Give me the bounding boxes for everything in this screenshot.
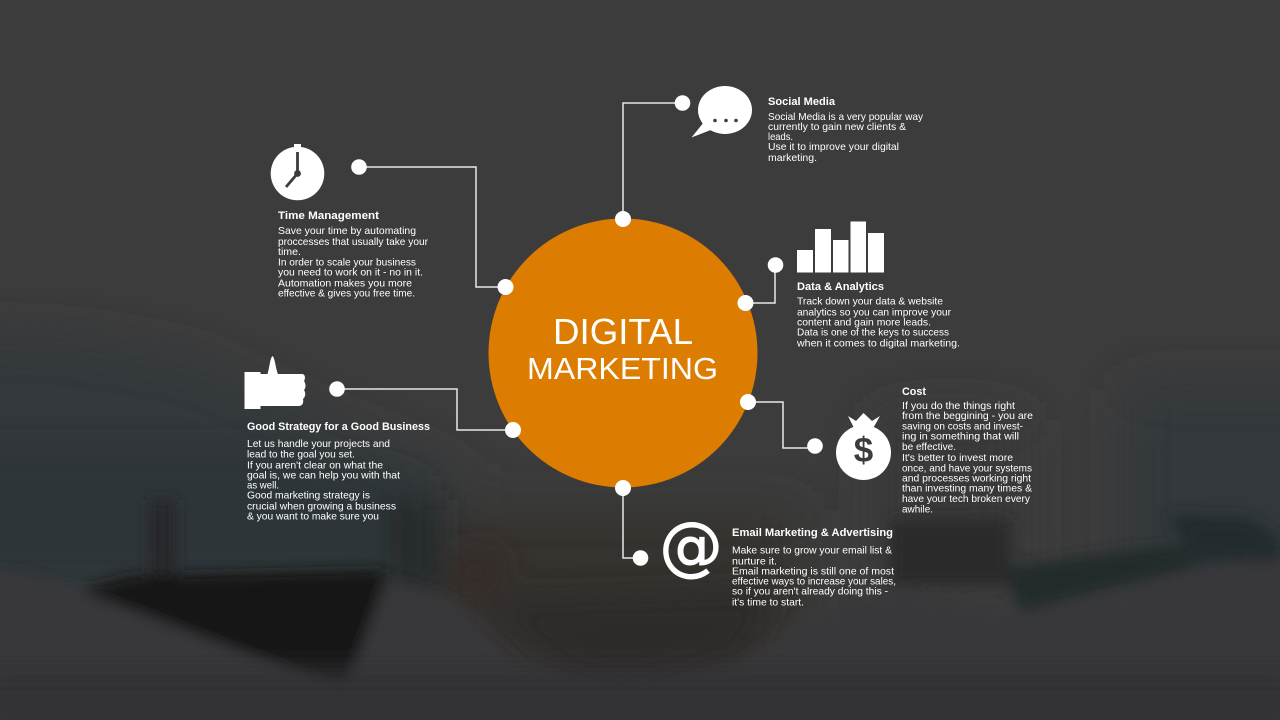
text: email marketing body: Make sure to grow your email list & [732, 544, 892, 556]
text: cost body [902, 400, 1033, 516]
heading: good strategy: Good Strategy for a Good Business [247, 421, 430, 433]
text: good strategy body: lead to the goal you set. [247, 448, 355, 460]
icon: clock [271, 144, 324, 200]
panel: cost [836, 386, 1033, 516]
text: time management body: In order to scale your business [278, 256, 416, 268]
text: time management body: Automation makes you more [278, 278, 412, 290]
panel: time management [271, 144, 428, 300]
text: good strategy body: as well. [247, 480, 279, 492]
text: email marketing body: Email marketing is still one of most [732, 566, 894, 578]
text: cost body: have your tech broken every [902, 493, 1031, 505]
text: social media body [768, 111, 924, 164]
text: good strategy body: crucial when growing a business [247, 500, 396, 512]
panel: data and analytics [796, 222, 960, 350]
text: social media body: Social Media is a very popular way [768, 111, 924, 123]
heading: data and analytics: Data & Analytics [797, 281, 884, 293]
text: time management body [278, 225, 428, 300]
text: cost body: ing in something that will [902, 430, 1019, 442]
text: cost body: If you do the things right [902, 400, 1015, 412]
text: cost body: and processes working right [902, 472, 1031, 484]
text: time management body: time. [278, 246, 301, 258]
icon: money bag: $ [854, 431, 873, 470]
text: data and analytics body [796, 296, 960, 350]
text: cost body: than investing many times & [902, 482, 1032, 494]
text: data and analytics body: Track down your data & website [797, 296, 943, 308]
text: email marketing body: it's time to start. [732, 596, 804, 608]
central title: DIGITAL [553, 311, 693, 352]
heading: social media: Social Media [768, 96, 836, 108]
connector dots [329, 95, 823, 566]
text: data and analytics body: analytics so you can improve your [797, 306, 951, 318]
text: data and analytics body: Data is one of the keys to success [797, 326, 949, 338]
heading: cost: Cost [902, 386, 926, 398]
text: email marketing body: so if you aren't already doing this - [732, 586, 888, 598]
icon: at sign: @ [660, 510, 722, 584]
icon: money bag [836, 413, 891, 480]
heading: email marketing: Email Marketing & Advertising [732, 527, 893, 539]
text: data and analytics body: content and gain more leads. [797, 316, 931, 328]
heading: time management: Time Management [278, 210, 379, 222]
text: cost body: be effective. [902, 441, 956, 453]
text: good strategy body: goal is, we can help you with that [247, 470, 400, 482]
text: social media body: Use it to improve your digital [768, 141, 899, 153]
text: cost body: once, and have your systems [902, 462, 1032, 474]
icon: bar chart [797, 222, 884, 272]
text: cost body: awhile. [902, 504, 933, 516]
central title [527, 311, 718, 386]
text: email marketing body [732, 544, 896, 608]
connector lines [337, 103, 815, 558]
central title: MARKETING [527, 351, 718, 386]
text: good strategy body: & you want to make sure you [247, 510, 379, 522]
text: time management body: proccesses that usually take your [278, 236, 428, 248]
icon: speech bubble [692, 86, 752, 138]
text: data and analytics body: when it comes to digital marketing. [796, 338, 960, 350]
text: good strategy body: Let us handle your projects and [247, 438, 390, 450]
text: cost body: saving on costs and invest- [902, 420, 1023, 432]
text: time management body: Save your time by automating [278, 225, 416, 237]
panel: social media [692, 86, 924, 164]
text: good strategy body: If you aren't clear on what the [247, 460, 383, 472]
icon: thumbs up [244, 356, 306, 409]
text: email marketing body: effective ways to increase your sales, [732, 576, 896, 588]
panel: good strategy [244, 356, 430, 522]
text: social media body: marketing. [768, 152, 817, 164]
text: social media body: leads. [768, 131, 793, 143]
text: good strategy body: Good marketing strategy is [247, 490, 370, 502]
text: cost body: It's better to invest more [902, 452, 1013, 464]
text: good strategy body [247, 438, 400, 522]
text: cost body: from the beggining - you are [902, 410, 1033, 422]
central orange circle [488, 218, 758, 488]
text: time management body: you need to work on it - no in it. [278, 266, 423, 278]
text: email marketing body: nurture it. [732, 556, 777, 568]
text: social media body: currently to gain new clients & [768, 121, 906, 133]
text: time management body: effective & gives you free time. [278, 288, 415, 300]
panel: email marketing [660, 510, 896, 608]
